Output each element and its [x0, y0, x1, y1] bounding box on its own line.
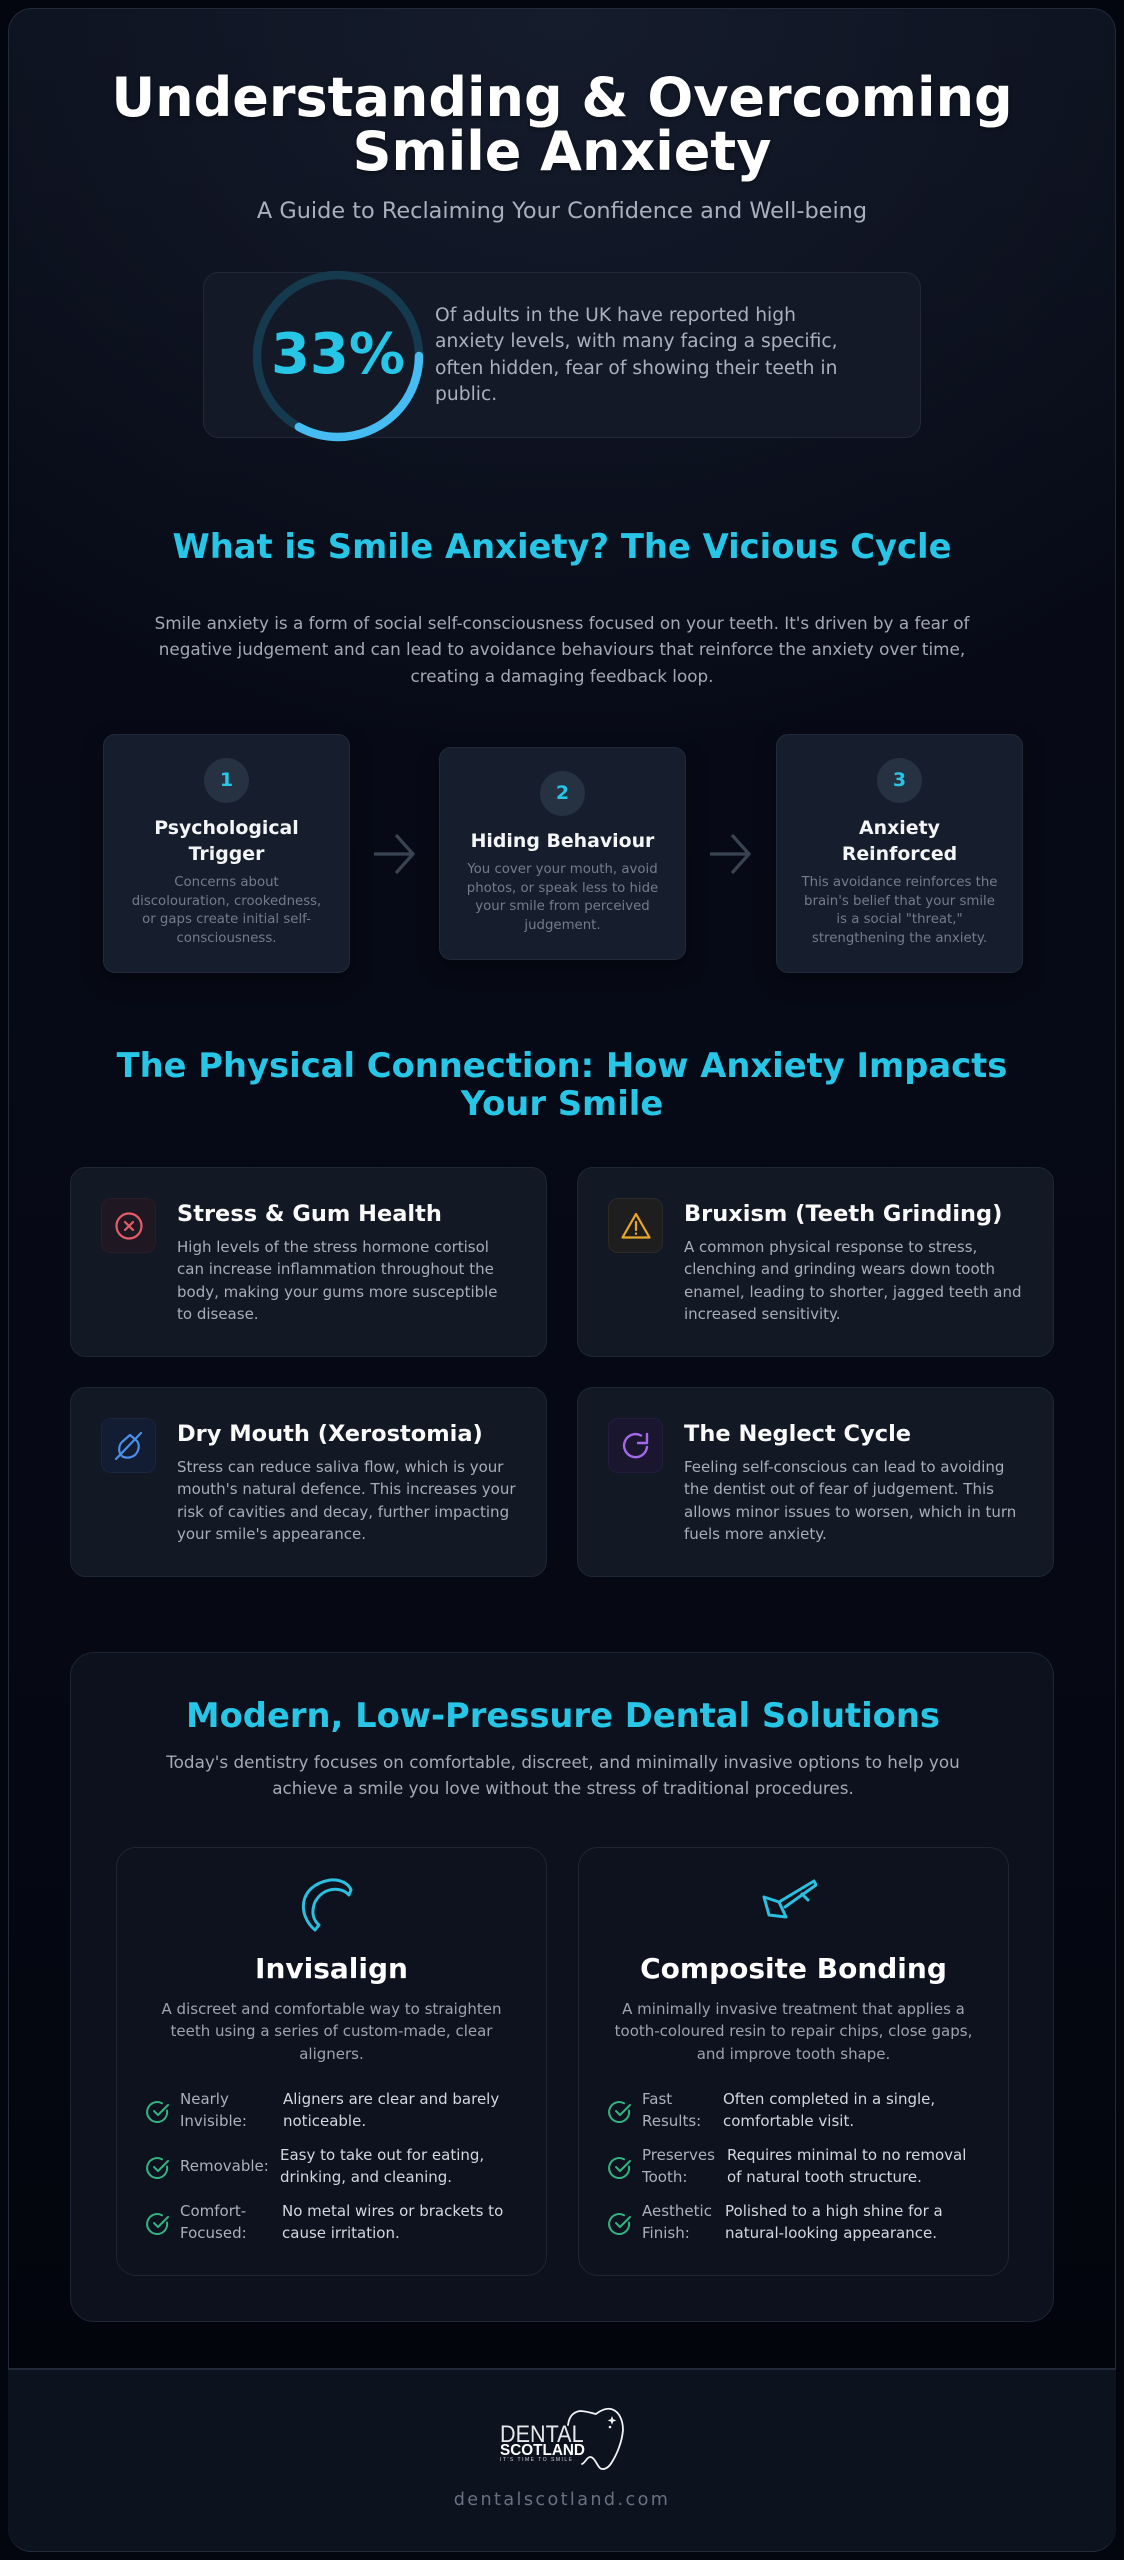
step 2 heading: Hiding Behaviour	[471, 830, 654, 852]
benefit text: drinking, and cleaning.	[280, 2168, 452, 2186]
icon: bonding tool	[762, 1879, 817, 1918]
stat description: Of adults in the UK have reported high	[435, 305, 796, 326]
card text: enamel, leading to shorter, jagged teeth and	[684, 1283, 1022, 1301]
title	[111, 66, 1013, 184]
logo word DENTAL: DENTAL	[500, 2419, 584, 2447]
solution title: Invisalign	[255, 1952, 408, 1985]
panel: statistic callout	[203, 272, 921, 438]
benefit label	[642, 2146, 715, 2186]
website address: dentalscotland.com	[454, 2490, 670, 2510]
heading: dental solutions: Modern, Low-Pressure Dental Solutions	[186, 1696, 940, 1735]
step 2 text: photos, or speak less to hide	[467, 881, 658, 896]
benefit text: noticeable.	[283, 2112, 366, 2130]
card text	[684, 1238, 1022, 1323]
card title: Stress & Gum Health	[177, 1201, 442, 1227]
benefit text	[725, 2200, 943, 2245]
step 3 heading: Reinforced	[842, 843, 957, 865]
solution text	[615, 2000, 972, 2063]
arrow: step 1 to 2	[374, 834, 415, 874]
step 1 text: consciousness.	[176, 931, 276, 946]
benefit row: fast results	[608, 2090, 935, 2130]
card text: A common physical response to stress,	[684, 1238, 977, 1256]
card text: can increase inflammation throughout the	[177, 1260, 494, 1278]
step 1 text	[132, 875, 321, 946]
panel: step 1	[103, 734, 350, 973]
panel: composite bonding	[578, 1847, 1009, 2276]
step 3 text: strengthening the anxiety.	[812, 931, 987, 946]
solution text: A minimally invasive treatment that applies a	[622, 2000, 965, 2018]
benefit label: Results:	[642, 2112, 701, 2130]
benefit label: Comfort-	[180, 2202, 246, 2220]
stat ring 33 percent	[252, 270, 424, 442]
benefit text: Easy to take out for eating,	[280, 2146, 484, 2164]
step 3 heading: Anxiety	[859, 817, 940, 839]
icon: aligner arcs	[302, 1878, 352, 1932]
benefit text: comfortable visit.	[723, 2112, 854, 2130]
logo word SCOTLAND: SCOTLAND	[500, 2442, 585, 2459]
benefit label	[642, 2090, 701, 2130]
panel: stress and gum health	[70, 1167, 547, 1357]
card text: your smile's appearance.	[177, 1525, 366, 1543]
card text	[177, 1238, 498, 1323]
panel: step 3	[776, 734, 1023, 973]
benefit label: Aesthetic	[642, 2202, 712, 2220]
panel: neglect cycle	[577, 1387, 1054, 1577]
icon: x circle	[101, 1198, 156, 1253]
step 1 text: discolouration, crookedness,	[132, 894, 321, 909]
logo tagline: IT'S TIME TO SMILE	[500, 2457, 574, 2463]
stat description: public.	[435, 384, 497, 405]
solution text: tooth-coloured resin to repair chips, close gaps,	[615, 2022, 972, 2040]
card title: Dry Mouth (Xerostomia)	[177, 1421, 483, 1447]
step 1 text: Concerns about	[174, 875, 279, 890]
solution text: and improve tooth shape.	[697, 2045, 890, 2063]
solution title: Composite Bonding	[640, 1952, 947, 1985]
benefit text: cause irritation.	[282, 2224, 400, 2242]
intro paragraph: creating a damaging feedback loop.	[411, 666, 713, 686]
solution text	[162, 2000, 501, 2063]
solution text: aligners.	[299, 2045, 364, 2063]
step 2 text: your smile from perceived	[475, 899, 650, 914]
step 3 text	[802, 875, 997, 946]
step number 2: 2	[556, 782, 569, 804]
benefit text: Aligners are clear and barely	[283, 2090, 499, 2108]
card text: allows minor issues to worsen, which in turn	[684, 1503, 1016, 1521]
step 2 text: judgement.	[524, 918, 601, 933]
benefit label: Invisible:	[180, 2112, 247, 2130]
benefit text	[282, 2202, 503, 2242]
solutions intro: achieve a smile you love without the stress of traditional procedures.	[272, 1778, 854, 1798]
step 3 text: This avoidance reinforces the	[802, 875, 997, 890]
step 3 heading	[842, 817, 957, 865]
icon: warning triangle	[608, 1198, 663, 1253]
card text: clenching and grinding wears down tooth	[684, 1260, 995, 1278]
stat description: often hidden, fear of showing their teeth in	[435, 358, 837, 379]
step 3 text: brain's belief that your smile	[804, 894, 995, 909]
benefit text: Often completed in a single,	[723, 2090, 935, 2108]
benefit label: Finish:	[642, 2224, 690, 2242]
step 1 heading: Trigger	[189, 843, 264, 865]
benefit row: removable	[146, 2146, 484, 2186]
panel: invisalign	[116, 1847, 547, 2276]
step number 1	[204, 758, 249, 803]
step 3 text: is a social "threat,"	[836, 912, 963, 927]
benefit text: natural-looking appearance.	[725, 2224, 937, 2242]
panel: dental solutions	[70, 1652, 1054, 2322]
benefit text: No metal wires or brackets to	[282, 2202, 503, 2220]
benefit text	[280, 2146, 484, 2186]
logo: Dental Scotland	[498, 2400, 628, 2472]
panel: dry mouth	[70, 1387, 547, 1577]
card text	[177, 1458, 516, 1543]
card text: High levels of the stress hormone cortisol	[177, 1238, 489, 1256]
icon: check	[608, 2157, 631, 2179]
benefit text	[723, 2090, 935, 2130]
benefit label: Preserves	[642, 2146, 715, 2164]
benefit text: Requires minimal to no removal	[727, 2146, 966, 2164]
card text: Feeling self-conscious can lead to avoiding	[684, 1458, 1004, 1476]
stat number: 33%	[271, 322, 405, 387]
benefit label	[180, 2090, 247, 2130]
card text	[684, 1458, 1016, 1543]
intro paragraph	[155, 613, 970, 686]
benefit label: Tooth:	[642, 2168, 687, 2186]
card text: increased sensitivity.	[684, 1305, 841, 1323]
solution text: teeth using a series of custom-made, clear	[171, 2022, 492, 2040]
panel: bruxism	[577, 1167, 1054, 1357]
step 2 text: You cover your mouth, avoid	[467, 862, 658, 877]
card text: fuels more anxiety.	[684, 1525, 827, 1543]
heading: vicious cycle: What is Smile Anxiety? The Vicious Cycle	[172, 527, 952, 566]
stat description: anxiety levels, with many facing a specific,	[435, 331, 838, 352]
benefit row: nearly invisible	[146, 2090, 499, 2130]
stat description	[435, 305, 838, 405]
benefit label: Focused:	[180, 2224, 247, 2242]
step number 1: 1	[220, 769, 233, 791]
card text: to disease.	[177, 1305, 259, 1323]
panel: step 2	[439, 747, 686, 960]
benefit label: Fast	[642, 2090, 672, 2108]
icon: check	[608, 2212, 632, 2236]
step 1 heading	[154, 817, 299, 865]
benefit label	[180, 2202, 247, 2242]
card text: body, making your gums more susceptible	[177, 1283, 498, 1301]
step 1 text: or gaps create initial self-	[142, 912, 311, 927]
benefit label: Removable:	[180, 2157, 269, 2175]
icon: refresh cycle	[608, 1418, 663, 1473]
step 2 text	[467, 862, 658, 933]
subtitle: A Guide to Reclaiming Your Confidence and Well-being	[257, 198, 867, 224]
card text: the dentist out of fear of judgement. This	[684, 1480, 994, 1498]
intro paragraph: negative judgement and can lead to avoidance behaviours that reinforce the anxiety over time,	[159, 639, 965, 659]
solutions intro: Today's dentistry focuses on comfortable, discreet, and minimally invasive options to help you	[166, 1752, 960, 1772]
icon: check	[608, 2101, 631, 2123]
solutions intro	[166, 1752, 960, 1798]
icon: check	[146, 2101, 169, 2123]
step number 3	[877, 758, 922, 803]
step number 3: 3	[893, 769, 906, 791]
benefit text: of natural tooth structure.	[727, 2168, 922, 2186]
benefit text	[727, 2146, 966, 2186]
icon: check	[146, 2157, 169, 2179]
heading: physical connection: The Physical Connection: How Anxiety Impacts	[117, 1046, 1007, 1085]
card text: Stress can reduce saliva flow, which is your	[177, 1458, 503, 1476]
title: Smile Anxiety	[353, 120, 771, 183]
benefit text: Polished to a high shine for a	[725, 2202, 943, 2220]
heading: physical connection	[116, 1046, 1007, 1123]
icon: check	[146, 2213, 169, 2235]
title: Understanding & Overcoming	[111, 66, 1013, 129]
icon: tooth outline	[498, 2400, 628, 2472]
icon: crossed droplet	[101, 1418, 156, 1473]
benefit row: aesthetic finish	[579, 2200, 1010, 2246]
benefit label	[642, 2200, 712, 2245]
footer	[8, 2368, 1116, 2552]
heading: physical connection: Your Smile	[461, 1084, 663, 1123]
card title: The Neglect Cycle	[684, 1421, 911, 1447]
benefit label: Nearly	[180, 2090, 229, 2108]
intro paragraph: Smile anxiety is a form of social self-consciousness focused on your teeth. It's driven by a fear of	[155, 613, 969, 633]
benefit row: preserves tooth	[608, 2146, 966, 2186]
solution text: A discreet and comfortable way to straighten	[162, 2000, 501, 2018]
arrow: step 2 to 3	[710, 834, 751, 874]
card title: Bruxism (Teeth Grinding)	[684, 1201, 1002, 1227]
step 1 heading: Psychological	[154, 817, 299, 839]
benefit text	[283, 2090, 499, 2130]
step number 2	[540, 771, 585, 816]
card text: mouth's natural defence. This increases your	[177, 1480, 516, 1498]
benefit row: comfort focused	[146, 2202, 503, 2242]
card text: risk of cavities and decay, further impacting	[177, 1503, 509, 1521]
